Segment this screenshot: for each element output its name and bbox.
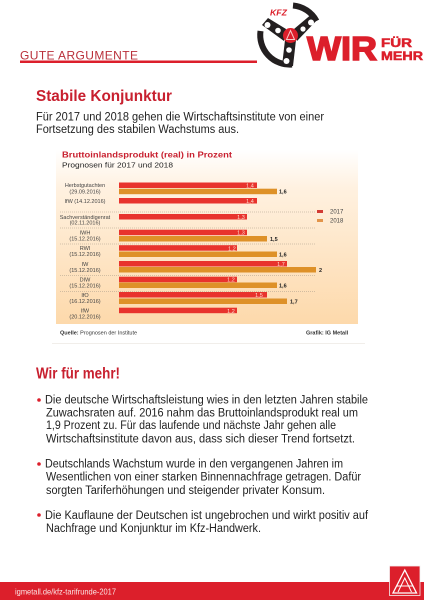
bar chart: forecasts: 1,6 [279, 252, 287, 258]
institute labels: (02.11.2016) [70, 220, 101, 226]
institute labels: (29.09.2016) [69, 190, 101, 196]
bar chart: forecasts: 1,7 [290, 300, 298, 306]
panel: GDP chart [52, 150, 365, 344]
bullet text 2 [37, 458, 361, 497]
chart title: Bruttoinlandsprodukt (real) in Prozent [62, 150, 232, 160]
bullet text 1 [37, 394, 368, 446]
bar chart: forecasts: 1,5 [255, 293, 263, 299]
institute labels: Sachverständigenrat [60, 215, 111, 221]
bar chart: forecasts: 1,7 [277, 262, 285, 268]
legend: 2018 [330, 218, 344, 224]
bullet text 2: Deutschlands Wachstum wurde in den vergangenen Jahren im [45, 458, 343, 470]
bullet text 3 [37, 510, 369, 535]
logo: Kfz Wir für mehr steering wheel: FÜR [381, 35, 412, 50]
chart subtitle: Prognosen für 2017 und 2018 [62, 161, 173, 170]
bar chart: forecasts: 1,4 [246, 184, 254, 190]
heading: Gute Argumente: GUTE ARGUMENTE [20, 48, 138, 62]
legend: 2017 [330, 210, 344, 216]
bar chart: forecasts: 1,6 [279, 284, 287, 290]
bullet text 3: Die Kauflaune der Deutschen ist ungebrochen und wirkt positiv auf [45, 510, 369, 522]
footer band: igmetall.de/kfz-tarifrunde-2017 [15, 586, 116, 596]
bullet text 2: sorgten Tariferhöhungen und steigender privater Konsum. [46, 485, 325, 497]
institute labels: IfW (14.12.2016) [65, 199, 106, 205]
source note: Quelle: Prognosen der Institute [60, 331, 137, 337]
bar chart: forecasts: 1,3 [237, 215, 245, 221]
bar chart: forecasts [119, 182, 322, 315]
institute labels: (20.12.2016) [69, 314, 101, 320]
graphic credit: Grafik: IG Metall [306, 331, 349, 337]
footer band [0, 582, 424, 600]
intro text: Für 2017 und 2018 gehen die Wirtschaftsinstitute von einer [36, 112, 324, 124]
bullet text 1: Die deutsche Wirtschaftsleistung wies in den letzten Jahren stabile [45, 394, 368, 406]
institute labels: DIW [80, 278, 91, 284]
heading: Stabile Konjunktur: Stabile Konjunktur [36, 88, 172, 105]
bar chart: forecasts: 1,2 [227, 309, 235, 315]
logo: Kfz Wir für mehr steering wheel: MEHR [381, 49, 423, 63]
logo: Kfz Wir für mehr steering wheel: WIR [307, 30, 377, 67]
institute labels: IWH [80, 230, 90, 236]
institute labels: (16.12.2016) [69, 299, 101, 305]
bar chart: forecasts: 2 [319, 268, 322, 274]
institute labels: RWI [80, 246, 91, 252]
intro text: Fortsetzung des stabilen Wachstums aus. [36, 124, 239, 136]
bar chart: forecasts: 1,3 [237, 231, 245, 237]
institute labels: (15.12.2016) [69, 284, 101, 290]
institute labels: IfO [81, 293, 89, 299]
bar chart: forecasts: 1,4 [246, 199, 254, 205]
bullet text 1: 1,9 Prozent zu. Für das laufende und nächste Jahr gehen alle [46, 420, 336, 432]
logo: IG Metall [390, 566, 420, 596]
institute labels: (15.12.2016) [69, 268, 101, 274]
bar chart: forecasts: 1,6 [279, 190, 287, 196]
institute labels: IW [82, 262, 89, 268]
row separators [60, 212, 315, 292]
logo: Kfz Wir für mehr steering wheel [260, 6, 423, 67]
bar chart: forecasts: 1,5 [270, 237, 278, 243]
bullet text 1: Zuwachsraten auf. 2016 nahm das Bruttoinlandsprodukt real um [46, 408, 358, 420]
bar chart: forecasts: 1,2 [228, 246, 236, 252]
bullet text 2: Wesentlichen von einer starken Binnennachfrage getragen. Dafür [46, 472, 361, 484]
heading: Wir für mehr: Wir für mehr! [36, 366, 120, 382]
institute labels: (15.12.2016) [69, 252, 101, 258]
legend [317, 210, 344, 224]
logo: Kfz Wir für mehr steering wheel: KFZ [270, 8, 288, 18]
intro text [36, 112, 324, 136]
institute labels: IfW [81, 308, 90, 314]
institute labels: Herbstgutachten [65, 183, 105, 189]
bullet text 1: Wirtschaftsinstitute davon aus, dass sich dieser Trend fortsetzt. [46, 434, 355, 446]
bar chart: forecasts: 1,2 [227, 278, 235, 284]
institute labels [60, 183, 111, 320]
bullet text 3: Nachfrage und Konjunktur im Kfz-Handwerk. [46, 523, 261, 535]
institute labels: (15.12.2016) [69, 236, 101, 242]
